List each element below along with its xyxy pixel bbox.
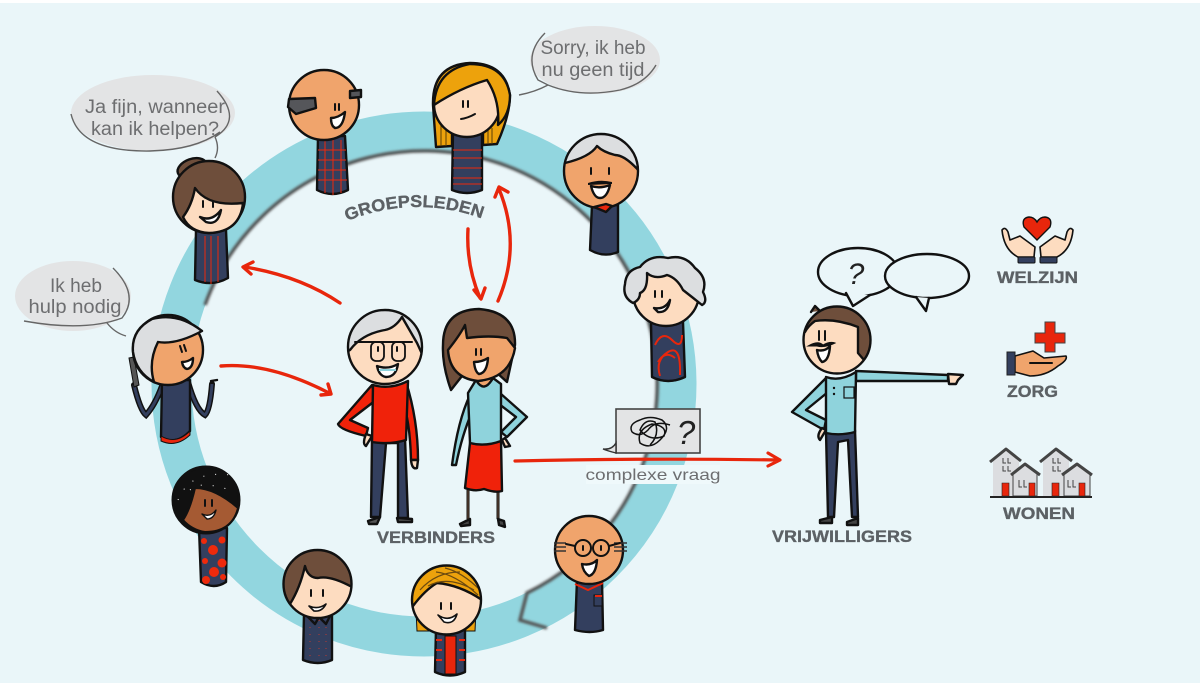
speech bubble: sorry: Sorry, ik heb — [540, 38, 646, 59]
person: bald man with round glasses — [554, 516, 627, 632]
ring — [172, 132, 676, 636]
person: young man — [282, 548, 353, 664]
speech bubble: sorry — [519, 26, 660, 95]
person: verbinder woman with red skirt — [443, 309, 527, 527]
label: verbinders: VERBINDERS — [377, 528, 495, 547]
person: curly grey haired woman — [624, 257, 705, 381]
icon: wonen houses — [990, 449, 1092, 497]
label: welzijn: WELZIJN — [997, 268, 1078, 287]
callout: complexe vraag — [586, 409, 720, 484]
icon: welzijn heart and hands — [1002, 217, 1073, 263]
person: woman with phone — [129, 315, 217, 443]
callout: complexe vraag: complexe vraag — [586, 467, 720, 484]
speech bubble: ja fijn — [71, 75, 235, 158]
arrow: groepsleden naar verbinder — [468, 229, 485, 299]
label: wonen: WONEN — [1003, 504, 1075, 523]
person: man with moustache — [562, 132, 640, 256]
speech bubbles: vrijwilliger — [818, 248, 969, 311]
arrow: verbinders to groepslid links — [243, 262, 340, 303]
person: bald man with plaid shirt — [288, 70, 361, 195]
arrow: verbinder naar groepsleden — [495, 187, 510, 301]
arrow: hulpvraag naar verbinders — [221, 366, 331, 395]
callout: complexe vraag: ? — [677, 414, 696, 451]
speech bubble: ik heb hulp nodig: Ik heb — [50, 276, 102, 297]
label: zorg: ZORG — [1007, 382, 1058, 401]
person: verbinder man in red sweater — [338, 300, 430, 524]
speech bubble: sorry: nu geen tijd — [542, 60, 644, 81]
icon: zorg hand and cross — [1007, 322, 1066, 376]
arrow: naar vrijwilligers — [515, 453, 780, 466]
speech bubble: ja fijn: kan ik helpen? — [91, 119, 219, 140]
person: woman with bun — [173, 154, 245, 284]
speech bubble: ik heb hulp nodig: hulp nodig — [28, 297, 122, 318]
person: vrijwilliger pointing — [792, 300, 963, 525]
speech bubble: ik heb hulp nodig — [15, 261, 131, 336]
person: blonde woman, frowning — [433, 63, 510, 193]
person: woman with dark curly hair — [173, 467, 239, 586]
speech bubbles: vrijwilliger: ? — [848, 258, 865, 291]
person: woman with striped blonde hair — [410, 564, 482, 677]
label: groepsleden: GROEPSLEDEN — [345, 194, 484, 220]
label: vrijwilligers: VRIJWILLIGERS — [772, 527, 912, 546]
speech bubble: ja fijn: Ja fijn, wanneer — [85, 97, 226, 118]
